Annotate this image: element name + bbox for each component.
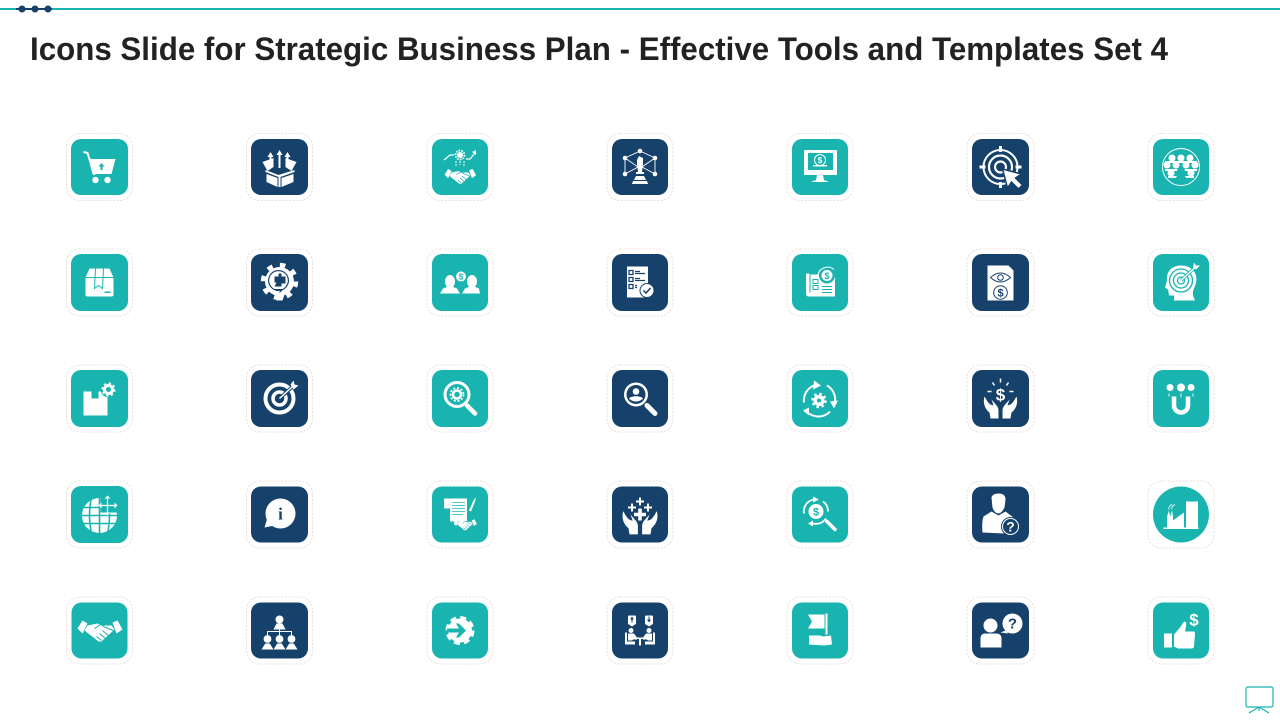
- icon: speech bubble info: i: [278, 504, 283, 524]
- icon: crowd in circle: [1148, 134, 1214, 200]
- icon: organization chart: [246, 597, 312, 664]
- icon: gear head with puzzle: [246, 249, 312, 316]
- icon: thumbs up with dollar: $: [1189, 610, 1199, 630]
- icon: person with question bubble: ?: [1008, 616, 1017, 632]
- icon: document with eye and dollar: [967, 249, 1034, 316]
- icon: hands with dollar: [967, 365, 1034, 432]
- icon: person with question bubble: [967, 597, 1034, 664]
- icon: gear with arrow: [427, 597, 493, 664]
- icon: hands with dollar: $: [996, 386, 1006, 404]
- title: Icons Slide for Strategic Business Plan - Effective Tools and Templates Set 4: [30, 31, 1168, 67]
- icon: chess piece network: [607, 134, 673, 200]
- icon: magnifier with gear: [427, 365, 493, 432]
- header decoration line: [0, 6, 1280, 12]
- icon: handshake with gear and trends: [427, 134, 493, 200]
- icon: factory in circle: [1148, 481, 1214, 548]
- icon: magnifier with dollar: $: [813, 506, 819, 518]
- icon: contract with handshake: [427, 481, 493, 548]
- icon: meeting across table: [607, 597, 673, 664]
- icon: person with question mark: ?: [1006, 518, 1015, 534]
- icon: recycle arrows with gear: [787, 365, 853, 432]
- icon: speech bubble info: [246, 481, 312, 548]
- icon: magnifier with dollar: [787, 481, 853, 548]
- icon: magnifier with person: [607, 365, 673, 432]
- icon: person with question mark: [967, 481, 1034, 548]
- icon: checklist document: [607, 249, 673, 316]
- icon: head with target: [1148, 249, 1214, 316]
- icon: monitor with dollar: $: [818, 156, 823, 165]
- icon: shopping cart: [66, 134, 132, 200]
- icon: blueprint with coin: $: [824, 271, 830, 281]
- icon: hands with plus signs: [607, 481, 673, 548]
- icon: hand holding flag: [787, 597, 853, 664]
- icon: globe with move arrows: [66, 481, 132, 548]
- icon: box with gear: [66, 365, 132, 432]
- icon: target with cursor: [967, 134, 1034, 200]
- icon: open box with arrows: [246, 134, 312, 200]
- icon: handshake: [66, 597, 132, 664]
- icon: monitor with dollar: [787, 134, 853, 200]
- icon: two people with dollar coin: [427, 249, 493, 316]
- icon: magnet with coins: [1148, 365, 1214, 432]
- icon: target with arrow: [246, 365, 312, 432]
- icon: parcel box: [66, 249, 132, 316]
- icon: two people with dollar coin: $: [459, 272, 464, 282]
- icon: thumbs up with dollar: [1148, 597, 1214, 664]
- icon: presentation screen: [1246, 687, 1273, 713]
- icon: document with eye and dollar: $: [997, 288, 1004, 300]
- icon: blueprint with coin: [787, 249, 853, 316]
